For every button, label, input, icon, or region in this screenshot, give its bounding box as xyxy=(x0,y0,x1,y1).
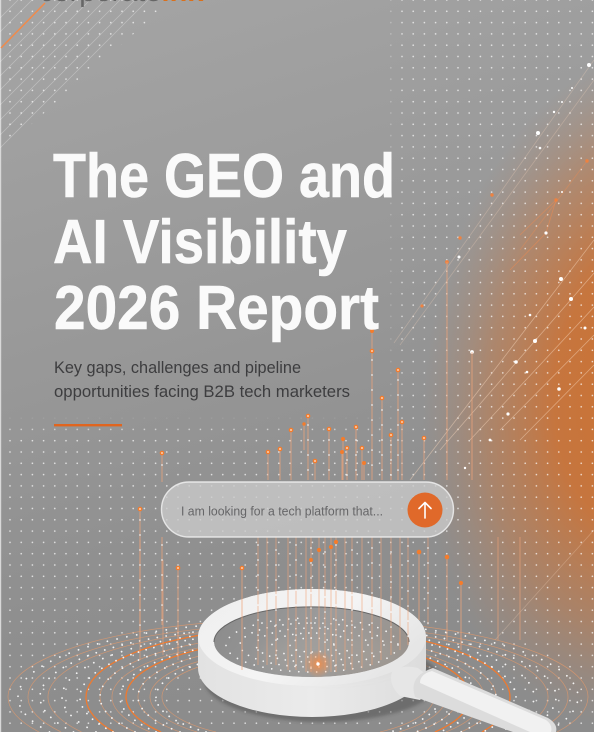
accent rule xyxy=(54,424,122,426)
dots inside lens xyxy=(226,618,398,672)
icon: submit arrow xyxy=(408,492,442,528)
top-left diagonal dot pattern xyxy=(0,0,156,148)
subtitle: Key gaps, challenges and pipeline xyxy=(54,358,301,377)
magnifying glass xyxy=(198,589,556,732)
title: The GEO and xyxy=(53,142,395,211)
title xyxy=(53,142,395,343)
concentric rings xyxy=(8,619,588,732)
right sparkle nodes xyxy=(420,63,591,469)
search placeholder: I am looking for a tech platform that... xyxy=(181,504,383,518)
right diagonal lines xyxy=(394,60,594,640)
subtitle: opportunities facing B2B tech marketers xyxy=(54,382,350,401)
white dots on data lines xyxy=(140,360,428,672)
handle xyxy=(391,667,556,732)
subtitle xyxy=(54,358,350,401)
search bar xyxy=(162,482,454,537)
title: AI Visibility xyxy=(53,208,347,277)
lens focus glow xyxy=(304,650,332,678)
lens body xyxy=(198,589,426,717)
vertical data lines xyxy=(140,262,520,672)
title: 2026 Report xyxy=(54,274,379,343)
lens shadow xyxy=(204,638,440,722)
search field xyxy=(162,482,454,537)
orange nodes xyxy=(138,329,463,678)
